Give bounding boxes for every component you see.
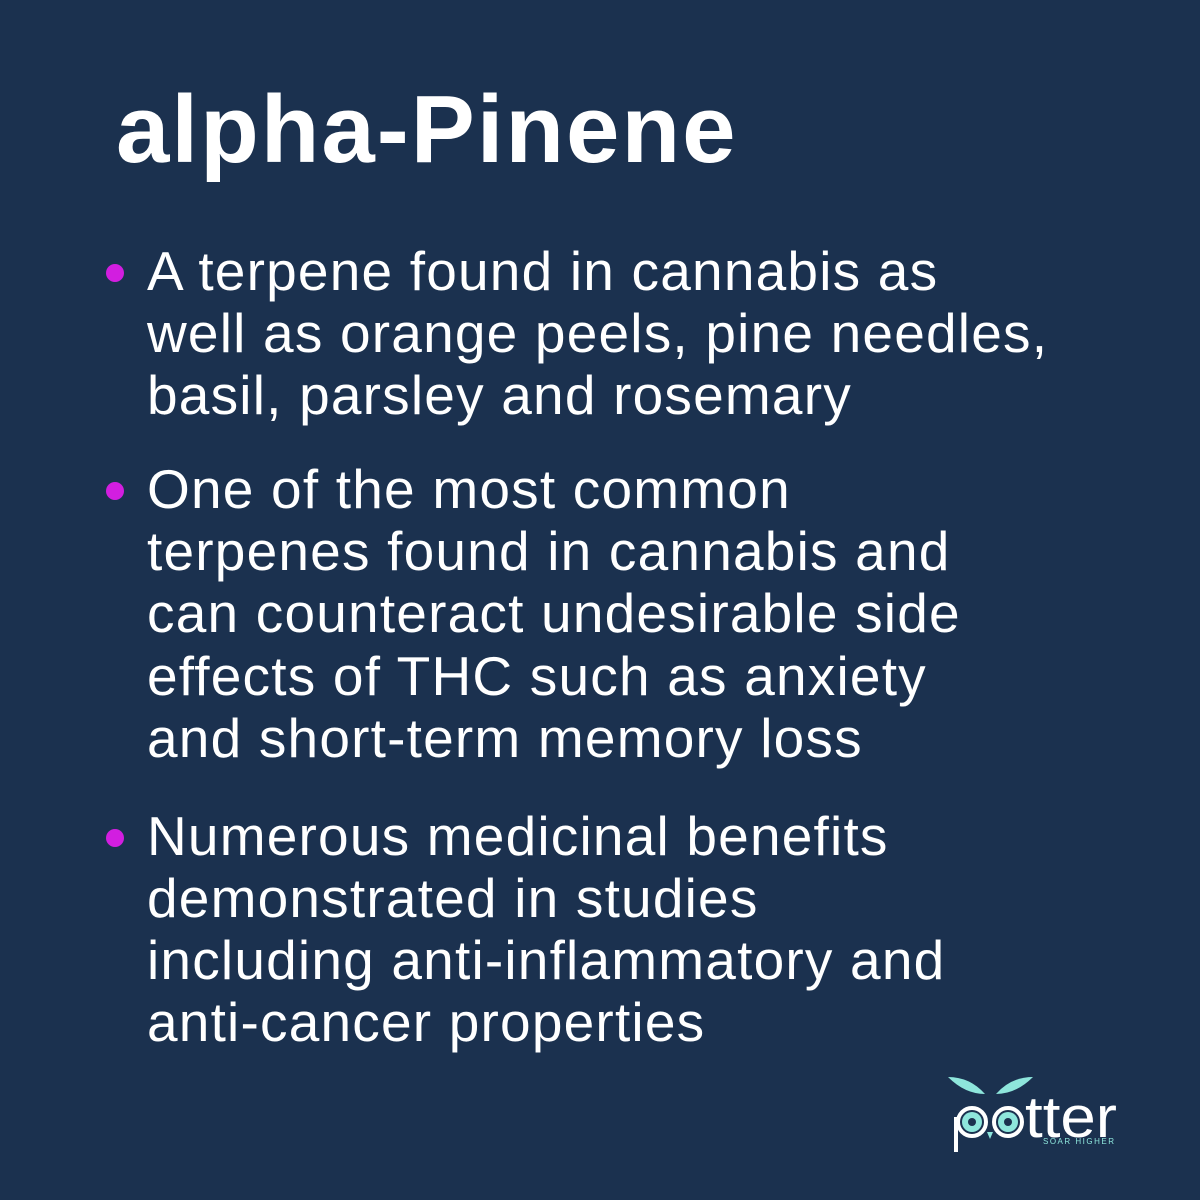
text 2: can counteract undesirable side <box>147 582 961 644</box>
text 3: including anti-inflammatory and <box>147 929 945 991</box>
text 2: One of the most common <box>147 458 791 520</box>
text 3: anti-cancer properties <box>147 991 705 1053</box>
dot 3 <box>106 829 124 847</box>
eyes <box>958 1108 986 1136</box>
text 2: terpenes found in cannabis and <box>147 520 951 582</box>
text 2: and short-term memory loss <box>147 707 863 769</box>
text 3: Numerous medicinal benefits <box>147 805 889 867</box>
text 1 <box>146 240 1048 426</box>
text 2: effects of THC such as anxiety <box>147 645 927 707</box>
bullet 3 <box>106 805 945 1053</box>
title: alpha-Pinene <box>116 76 737 183</box>
dot 2 <box>106 482 124 500</box>
logo: potter: SOAR HIGHER <box>1043 1137 1116 1146</box>
owl ears <box>948 1077 985 1094</box>
text 1: basil, parsley and rosemary <box>147 364 852 426</box>
logo: potter <box>948 1077 1117 1152</box>
text 1: well as orange peels, pine needles, <box>147 302 1048 364</box>
text 3 <box>147 805 945 1053</box>
text 2 <box>147 458 961 769</box>
bullet 1 <box>106 240 1048 426</box>
bullet 2 <box>106 458 961 769</box>
text 3: demonstrated in studies <box>147 867 759 929</box>
logo: potter: tter <box>1025 1085 1117 1150</box>
dot 1 <box>106 264 124 282</box>
text 1: A terpene found in cannabis as <box>147 240 938 302</box>
